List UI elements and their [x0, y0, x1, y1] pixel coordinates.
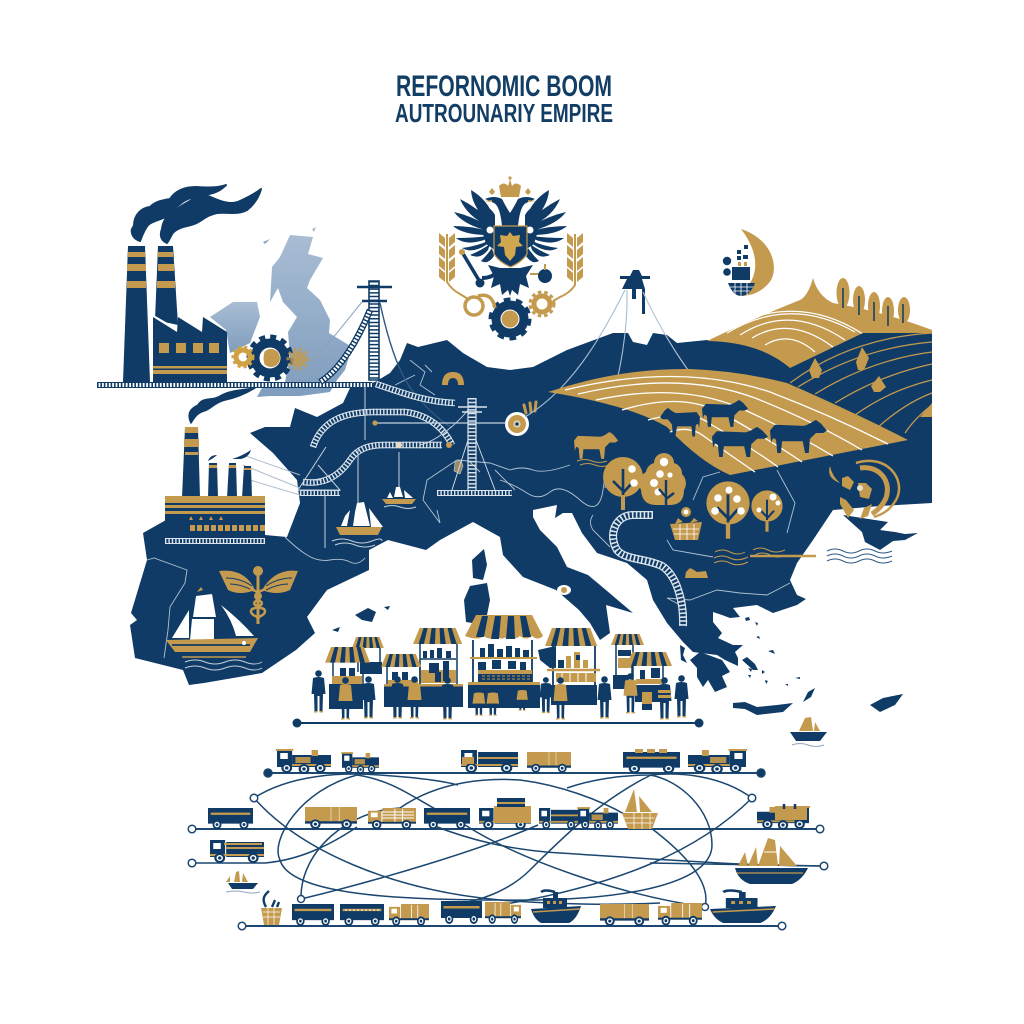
- double-headed eagle crest: [439, 176, 583, 338]
- gold field: [548, 369, 908, 475]
- transport row 1 vehicles: [276, 749, 747, 774]
- pylon and suspension track, north: [290, 281, 452, 428]
- western factory: [165, 388, 265, 538]
- small shrine, Italy: [557, 585, 571, 595]
- white rail tracks over France and Germany: [165, 384, 683, 626]
- market stalls: [325, 615, 672, 709]
- crown: [499, 179, 521, 197]
- top hub pylon and cables: [525, 270, 770, 455]
- hub roundel: [505, 402, 536, 436]
- Spanish ship: [166, 587, 262, 670]
- pylon, central Europe: [452, 398, 495, 490]
- gears near Britain: [233, 337, 308, 379]
- top factory: [123, 185, 261, 384]
- map: continental Europe: [130, 330, 932, 685]
- sceptre and orb: [462, 252, 480, 282]
- market people: [312, 670, 688, 720]
- transport row 4 vehicles: [261, 890, 776, 926]
- sailing ship, France small: [382, 487, 416, 508]
- stall right: [545, 628, 600, 705]
- smoke: [132, 185, 226, 241]
- title: AUTROUNARIY EMPIRE: [395, 98, 613, 128]
- transport row 3 vehicles: [210, 838, 808, 893]
- small gold dome: [442, 372, 464, 385]
- stall far right: [611, 634, 672, 702]
- fruit trees: [603, 453, 783, 539]
- small orchard: [836, 278, 910, 325]
- wheat left: [439, 233, 583, 301]
- gears under crest: [496, 305, 524, 333]
- waves and gold bar, south-east: [685, 548, 892, 578]
- upper gold hill with furrows: [707, 278, 932, 368]
- title: [395, 70, 613, 128]
- crescent of fruit: [829, 461, 899, 519]
- stall centre: [465, 615, 543, 708]
- sailing ship, France large: [332, 502, 383, 547]
- title: REFORNOMIC BOOM: [396, 70, 612, 103]
- stall left front: [325, 647, 370, 709]
- transport network: nodes: [188, 769, 828, 930]
- gold cow: [574, 432, 618, 466]
- stall second rear: [413, 628, 462, 686]
- map: British Isles: [210, 227, 352, 397]
- market timeline: [292, 718, 704, 728]
- map: islands: [332, 515, 918, 715]
- crescent moon emblem: [723, 229, 774, 296]
- harvest basket: [670, 507, 702, 540]
- stall left rear: [352, 637, 384, 674]
- top railway line: [97, 382, 372, 388]
- cows on field: [660, 408, 700, 437]
- eagle wings: [453, 190, 495, 262]
- small ship, east: [790, 717, 827, 746]
- stall second front: [381, 654, 463, 707]
- navy field with gold furrows: [790, 333, 932, 433]
- tail and claws: [488, 265, 533, 296]
- eagle necks and heads: [485, 197, 535, 226]
- western factory smoke: [189, 388, 255, 423]
- transport network: route lines: [192, 773, 824, 926]
- wheat right: [553, 234, 575, 301]
- transport row 2 vehicles: [208, 789, 810, 830]
- map: borders and rivers: [147, 360, 795, 658]
- shield: [494, 226, 527, 267]
- caduceus: [219, 566, 298, 624]
